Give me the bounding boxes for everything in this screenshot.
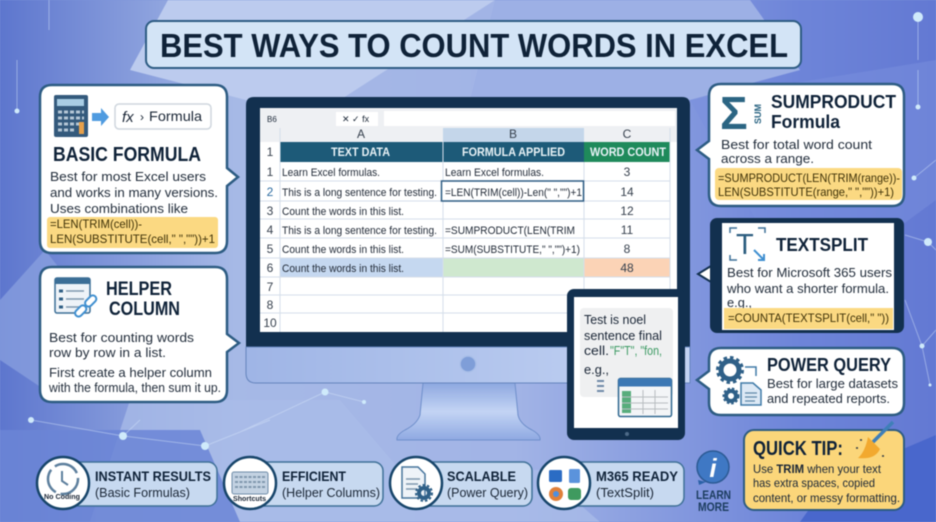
total row fills — [280, 258, 670, 277]
tip text: content, or messy formatting. — [753, 491, 900, 505]
description: Best for counting words — [49, 330, 195, 345]
badge: scalable — [390, 457, 532, 509]
panel: quick tip — [744, 422, 904, 510]
column c numbers: 8 — [624, 242, 631, 256]
description: with the formula, then sum it up. — [48, 380, 221, 395]
icon: textsplit: T — [736, 229, 754, 261]
formula bar: ✕ ✓ fx — [342, 114, 370, 124]
column b text: =SUMPRODUCT(LEN(TRIM — [445, 225, 575, 237]
icon: arrow — [92, 108, 109, 126]
badge: instant results — [37, 457, 217, 509]
icon: gears and document — [718, 358, 761, 405]
heading: TEXTSPLIT — [776, 235, 868, 255]
badge: instant results: No Coding — [44, 494, 80, 501]
formula bar: B6 — [267, 115, 277, 124]
column letters: A — [357, 127, 365, 141]
description: and repeated reports. — [767, 391, 890, 406]
icon: list — [597, 381, 604, 391]
row numbers — [263, 145, 277, 330]
description: who want a shorter formula. — [726, 281, 889, 296]
tablet text: sentence final — [584, 328, 662, 343]
panel: sumproduct — [697, 84, 904, 206]
column c numbers: 11 — [621, 223, 634, 237]
column letters: B — [509, 127, 517, 141]
description: e.g., — [727, 295, 752, 310]
badge: efficient: EFFICIENT — [282, 469, 347, 484]
column letters — [357, 127, 632, 141]
row numbers: 5 — [267, 242, 274, 256]
description: row by row in a list. — [49, 345, 166, 360]
panel: power query — [697, 348, 904, 415]
tablet text: e.g., — [584, 362, 609, 377]
badge: m365 ready: (TextSplit) — [596, 485, 654, 500]
learn more: LEARN — [696, 490, 731, 502]
fx formula box — [115, 104, 211, 129]
icon: sigma — [720, 87, 763, 139]
formula highlight: =LEN(TRIM(cell))- — [50, 217, 142, 231]
learn more — [696, 451, 731, 514]
fx formula box: › — [140, 110, 144, 124]
column b text — [442, 167, 584, 256]
icon: keyboard — [232, 472, 268, 494]
description — [767, 376, 898, 406]
icon: clock — [48, 464, 78, 494]
description: Uses combinations like — [50, 201, 188, 216]
icon: document and gear — [402, 467, 432, 501]
icon: calculator — [54, 95, 88, 137]
column b text: =SUM(SUBSTITUTE," ","")+1) — [445, 244, 580, 256]
column c numbers: 12 — [620, 204, 634, 218]
row numbers: 2 — [267, 185, 274, 199]
column c numbers: 14 — [620, 185, 634, 199]
column c numbers — [620, 165, 634, 275]
formula highlight: LEN(SUBSTITUTE(cell," ",""))+1 — [50, 232, 215, 246]
badge: scalable: SCALABLE — [447, 469, 516, 484]
badge: scalable: (Power Query) — [447, 485, 528, 500]
icon: info bubble: i — [709, 453, 717, 483]
row numbers: 6 — [267, 261, 274, 275]
heading: SUMPRODUCT — [771, 92, 896, 112]
column b text: Learn Excel formulas. — [445, 167, 544, 179]
description — [50, 169, 218, 216]
icon: mini spreadsheet — [618, 378, 672, 416]
icon: app logos — [549, 469, 581, 501]
header row: FORMULA APPLIED — [462, 147, 565, 159]
row numbers: 4 — [267, 223, 274, 237]
description: and works in many versions. — [50, 185, 218, 200]
icon: sigma: Σ — [720, 87, 748, 139]
row numbers: 7 — [267, 280, 274, 294]
icon: textsplit — [730, 228, 765, 261]
icon: broom — [856, 422, 893, 458]
column a text: Count the words in this list. — [282, 263, 404, 275]
column letters: C — [623, 127, 632, 141]
monitor body — [246, 97, 690, 383]
column c numbers: 3 — [624, 165, 631, 179]
badge: efficient — [224, 457, 383, 509]
column b text: =LEN(TRIM(cell))-Len(" ","")+1 — [445, 187, 582, 199]
badge: m365 ready: M365 READY — [596, 469, 678, 484]
row numbers: 1 — [267, 165, 274, 179]
fx formula box: fx — [122, 109, 134, 126]
badge: instant results: (Basic Formulas) — [95, 485, 190, 500]
description — [48, 330, 221, 395]
tip text: has extra spaces, copied — [753, 476, 875, 490]
formula highlight — [715, 168, 902, 200]
icon: helper column — [55, 278, 98, 318]
formula highlight: =SUMPRODUCT(LEN(TRIM(range))- — [718, 171, 900, 185]
description: Best for large datasets — [767, 376, 898, 391]
header row: WORD COUNT — [590, 147, 666, 159]
column a text: Learn Excel formulas. — [282, 167, 380, 179]
monitor — [246, 97, 690, 440]
spreadsheet — [260, 108, 677, 332]
column a text: Count the words in this list. — [282, 206, 404, 218]
tablet text: "F"T", "fon, — [610, 343, 662, 358]
heading: BASIC FORMULA — [53, 144, 201, 166]
column a text: Count the words in this list. — [282, 244, 404, 256]
description: First create a helper column — [49, 365, 212, 380]
formula highlight — [47, 217, 218, 248]
description: Best for Microsoft 365 users — [727, 265, 893, 280]
description: Best for most Excel users — [50, 169, 207, 184]
description — [721, 137, 872, 166]
row numbers: 8 — [267, 298, 274, 312]
header row — [280, 142, 670, 162]
column a text — [282, 167, 437, 275]
heading: QUICK TIP: — [753, 438, 843, 460]
tip text — [753, 462, 900, 505]
panel: helper column — [40, 267, 239, 402]
icon: sigma: SUM — [753, 104, 763, 124]
fx formula box: Formula — [149, 108, 202, 124]
heading: COLUMN — [109, 299, 180, 320]
heading: HELPER — [106, 279, 172, 300]
header row: TEXT DATA — [331, 147, 390, 159]
column c numbers: 48 — [620, 261, 634, 275]
formula highlight: LEN(SUBSTITUTE(range," ",""))+1) — [718, 185, 894, 199]
tablet text: Test is noel — [584, 312, 646, 327]
description: Best for total word count — [721, 137, 872, 152]
tablet — [567, 289, 685, 440]
row numbers: 1 — [267, 145, 274, 159]
heading — [771, 92, 896, 132]
row numbers: 10 — [263, 316, 277, 330]
description — [726, 265, 893, 310]
column a text: This is a long sentence for testing. — [282, 187, 437, 199]
badge: efficient: (Helper Columns) — [282, 485, 380, 500]
tip text: Use TRIM when your text — [753, 462, 882, 476]
monitor stand — [397, 383, 540, 440]
heading: Formula — [771, 112, 841, 132]
heading: POWER QUERY — [767, 355, 891, 375]
tablet text: cell. — [584, 343, 609, 358]
heading — [106, 279, 180, 320]
badge: m365 ready — [538, 457, 684, 509]
monitor button — [460, 356, 476, 372]
description: across a range. — [721, 151, 814, 166]
row numbers: 3 — [267, 204, 274, 218]
column a text: This is a long sentence for testing. — [282, 225, 437, 237]
formula bar — [267, 111, 675, 126]
panel: basic formula — [40, 85, 238, 253]
badge: instant results: INSTANT RESULTS — [95, 469, 211, 484]
formula highlight: =COUNTA(TEXTSPLIT(cell," ")) — [728, 311, 889, 325]
formula highlight — [724, 308, 893, 329]
badge: efficient: Shortcuts — [233, 496, 266, 503]
title: BEST WAYS TO COUNT WORDS IN EXCEL — [160, 27, 788, 64]
learn more: MORE — [698, 502, 729, 514]
tablet text — [584, 312, 662, 377]
panel: textsplit — [698, 218, 904, 333]
